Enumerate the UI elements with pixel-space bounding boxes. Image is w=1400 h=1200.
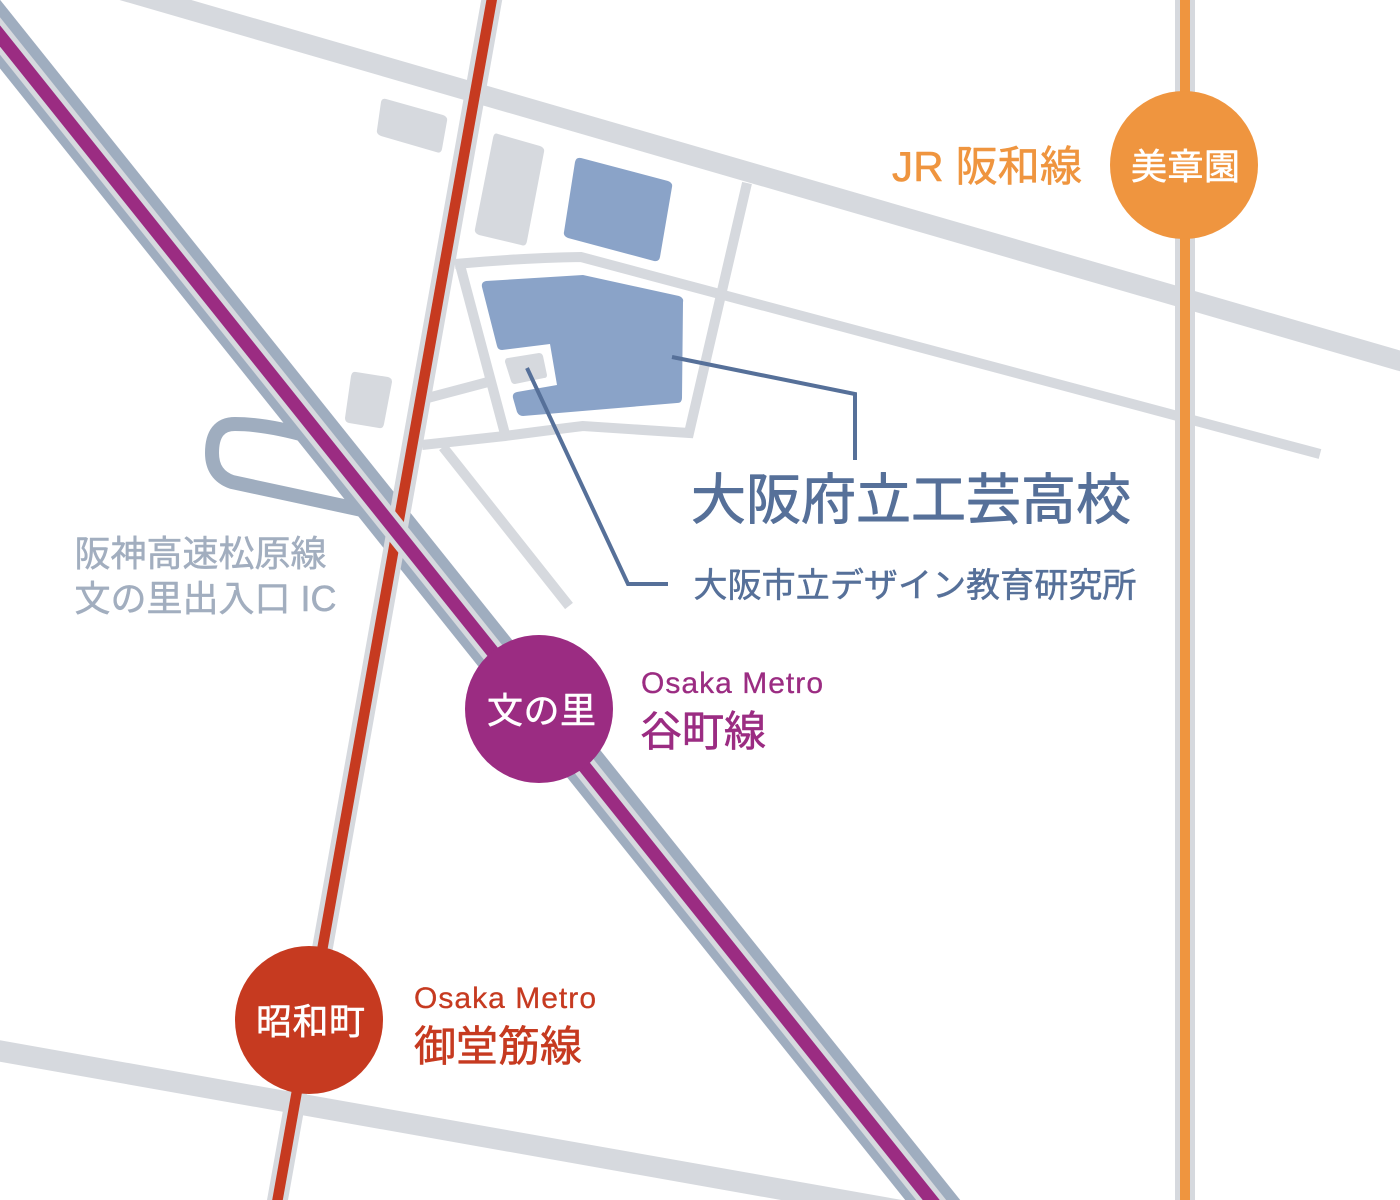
road: upper side street <box>455 257 1320 454</box>
expressway interchange label <box>74 533 336 619</box>
building: tall block <box>475 134 544 246</box>
school building: north wing <box>564 158 672 261</box>
Midosuji line <box>267 0 502 1200</box>
building: west block <box>345 372 392 428</box>
leader line: school <box>672 357 855 460</box>
midosuji line casing <box>267 0 502 1200</box>
station name: 美章園 <box>1131 146 1240 187</box>
label line 1: 阪神高速松原線 <box>74 533 326 574</box>
leader line: design institute <box>527 368 668 584</box>
line label: Tanimachi <box>640 667 823 755</box>
operator name: Osaka Metro <box>414 982 596 1015</box>
line label: JR Hanwa: JR 阪和線 <box>892 143 1082 190</box>
road: campus loop <box>422 183 747 445</box>
Hanshin expressway with ramp <box>0 0 960 1200</box>
Tanimachi line <box>0 17 946 1200</box>
station: Showacho <box>235 946 383 1094</box>
station: Bishoen <box>1110 91 1258 239</box>
line name: 御堂筋線 <box>414 1023 582 1070</box>
school name: 大阪府立工芸高校 <box>691 469 1131 531</box>
design institute name: 大阪市立デザイン教育研究所 <box>694 567 1136 605</box>
building: north-west block <box>377 99 447 153</box>
operator name: Osaka Metro <box>641 667 823 700</box>
station circle <box>235 946 383 1094</box>
design institute building <box>505 353 547 384</box>
station: Fuminosato <box>465 635 613 783</box>
road: campus west street <box>460 265 505 434</box>
line name: 谷町線 <box>640 708 766 755</box>
station circle <box>1110 91 1258 239</box>
road: short connector <box>420 382 488 400</box>
hanwa line track <box>1180 0 1190 1200</box>
road: upper main road <box>120 0 1400 371</box>
road: lower main road <box>0 1040 902 1200</box>
station name: 文の里 <box>487 690 596 731</box>
tanimachi line track <box>0 25 940 1200</box>
station circle <box>465 635 613 783</box>
school building: main wing <box>482 275 683 416</box>
tanimachi line casing <box>0 17 946 1200</box>
neighbouring buildings <box>345 99 544 428</box>
station name: 昭和町 <box>256 1001 365 1042</box>
label line 2: 文の里出入口 IC <box>74 578 336 619</box>
interchange ramp <box>212 424 362 510</box>
hanwa line casing <box>1175 0 1195 1200</box>
expressway <box>0 0 960 1200</box>
midosuji line track <box>272 0 497 1200</box>
line label: Midosuji <box>414 982 596 1070</box>
JR Hanwa line <box>1175 0 1195 1200</box>
road: diagonal street <box>443 447 569 606</box>
